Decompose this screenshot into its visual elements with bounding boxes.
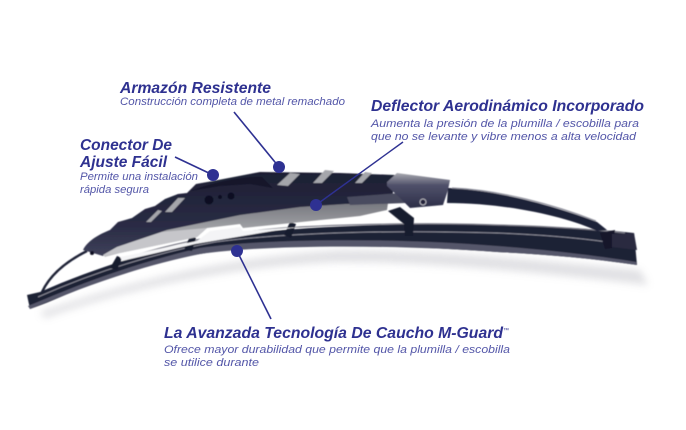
rubber blade (27, 224, 637, 309)
blade rail highlight (38, 232, 620, 297)
rivets (90, 192, 234, 255)
inner link (347, 193, 406, 205)
silver ribs (146, 170, 372, 222)
right arm (447, 188, 607, 231)
description line 2: se utilice durante (164, 357, 259, 369)
pin (420, 199, 426, 205)
left wire arm (42, 251, 87, 292)
white gap (120, 227, 300, 261)
description line 2: que no se levante y vibre menos a alta velocidad (371, 131, 637, 143)
callout: caucho (164, 245, 510, 369)
leader (234, 112, 279, 167)
dot (207, 169, 219, 181)
description: Construcción completa de metal remachado (120, 96, 345, 108)
silver deflector (103, 203, 388, 257)
description: Permite una instalación (80, 171, 198, 183)
end clip (600, 230, 615, 249)
trademark: ™ (503, 327, 509, 334)
wiper blade illustration (27, 170, 648, 318)
callout: deflector (310, 98, 644, 211)
blade top highlight (120, 224, 625, 260)
connector feet (110, 207, 414, 270)
head block (387, 173, 450, 208)
frame body (83, 172, 395, 256)
dot (231, 245, 243, 257)
leader (237, 251, 271, 319)
callout: armazon (119, 80, 345, 173)
description: Ofrece mayor durabilidad que permite que la plumilla / escobilla (164, 344, 510, 356)
deflector light tip (103, 228, 207, 255)
heading: Conector De (80, 137, 172, 154)
blade shadow (40, 250, 648, 318)
description line 2: rápida segura (80, 184, 149, 196)
heading: Armazón Resistente (119, 80, 271, 97)
heading: La Avanzada Tecnología De Caucho M-Guard (164, 325, 504, 342)
end cap (612, 233, 637, 250)
callout: conector (79, 137, 219, 196)
dot (273, 161, 285, 173)
arm highlight (452, 188, 596, 221)
leader (316, 142, 403, 205)
leader (175, 157, 213, 175)
heading line 2: Ajuste Fácil (79, 154, 168, 171)
description: Aumenta la presión de la plumilla / escobilla para (370, 118, 639, 130)
heading: Deflector Aerodinámico Incorporado (371, 98, 644, 115)
dot (310, 199, 322, 211)
blade lower band (28, 240, 637, 309)
frame shadow detail (190, 177, 273, 191)
